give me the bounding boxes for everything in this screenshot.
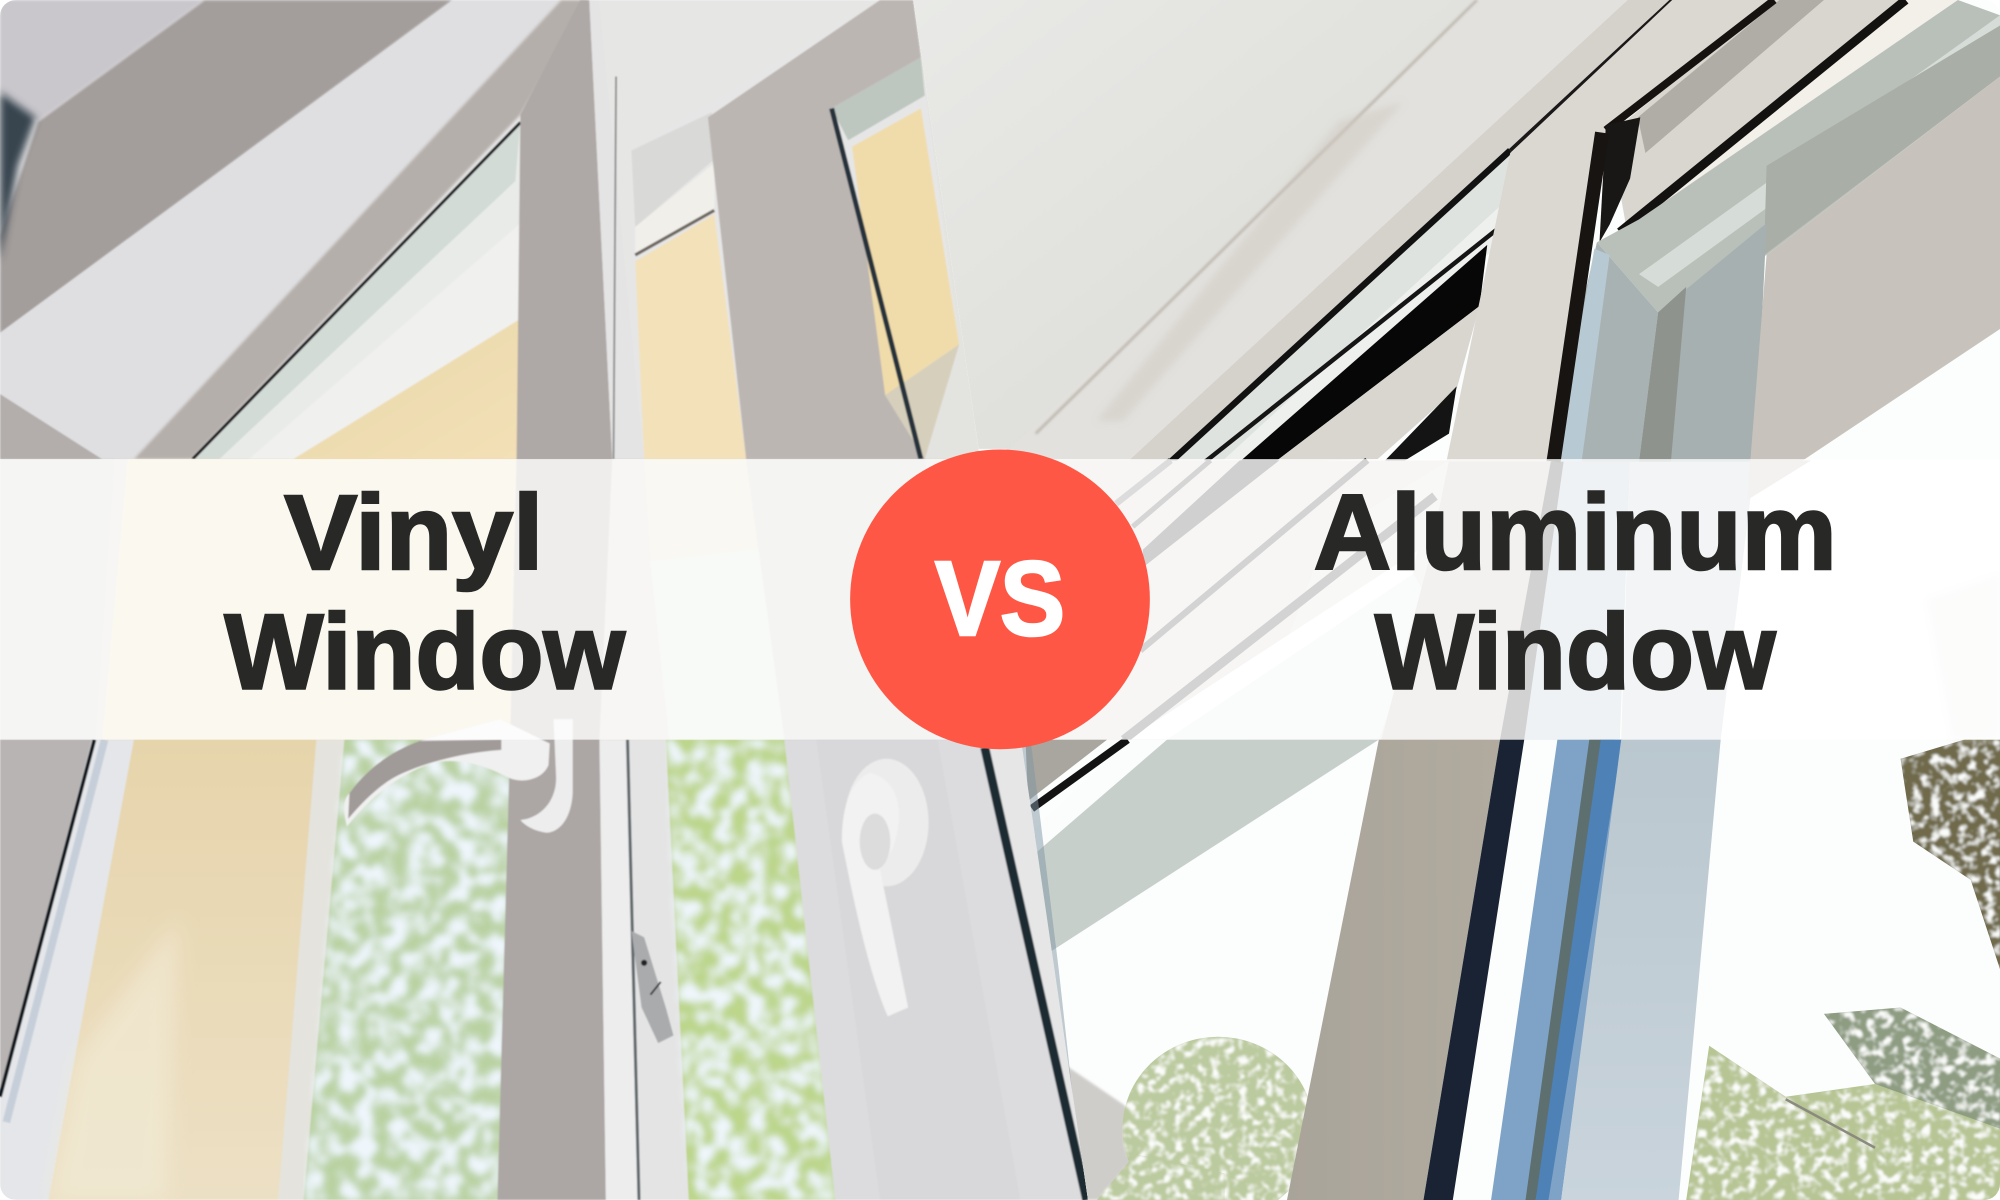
yellow wall through glass xyxy=(293,319,520,459)
garden view left xyxy=(304,740,513,1200)
title: vinyl window xyxy=(224,474,626,712)
top sash frame xyxy=(134,0,587,459)
centre post xyxy=(517,0,612,459)
yellow wall centre xyxy=(635,214,746,459)
title: vinyl window: Vinyl xyxy=(284,474,543,592)
blue glass edge xyxy=(1491,740,1622,1200)
tilted glass pane xyxy=(1597,0,2000,312)
garden view right xyxy=(666,740,835,1200)
title: aluminum window: Window xyxy=(1375,592,1776,712)
right foreground tree xyxy=(1686,1007,2000,1200)
icon: left window handle xyxy=(344,719,573,833)
sash glass xyxy=(191,121,520,459)
seal and glazing strips xyxy=(1171,150,1510,462)
tan strip xyxy=(1128,0,1672,462)
lower post xyxy=(497,740,606,1200)
roller blind at top left xyxy=(0,0,204,121)
panel: aluminum window photo xyxy=(893,0,2000,1200)
ceiling xyxy=(913,0,1480,449)
icon: right window handle xyxy=(842,759,929,1016)
icon: window lock hardware xyxy=(631,931,673,1043)
grey wall xyxy=(0,0,453,334)
diagonals behind the band xyxy=(1054,460,1446,740)
main vertical frame xyxy=(1446,0,1774,462)
band-hidden lower section base xyxy=(98,458,948,740)
title: aluminum window xyxy=(1314,472,1837,712)
lower right sash xyxy=(784,740,1088,1200)
glass vertical xyxy=(1546,242,1658,462)
ceiling mould strip xyxy=(982,0,1628,462)
lower left wall xyxy=(0,740,92,1090)
lower tan frame xyxy=(1287,740,1500,1200)
upper right foliage xyxy=(1900,740,2000,969)
title: aluminum window: Aluminum xyxy=(1314,472,1837,592)
badge: VS circle: VS xyxy=(935,540,1065,658)
white reveal xyxy=(0,2,452,334)
badge: VS circle xyxy=(850,450,1150,749)
yellow through right sash xyxy=(852,108,959,395)
right sash xyxy=(708,0,925,459)
lower glass wedge xyxy=(1034,740,1379,951)
trees and roof xyxy=(1065,1037,1314,1200)
beige interior wall through glass xyxy=(1747,77,2000,497)
translucent title band xyxy=(0,459,2000,740)
title: vinyl window: Window xyxy=(224,592,626,712)
window sliver at seam xyxy=(1022,746,1072,1093)
black gasket xyxy=(1423,740,1524,1200)
panel: vinyl window photo xyxy=(0,0,1097,1200)
upper back wall xyxy=(587,0,880,459)
